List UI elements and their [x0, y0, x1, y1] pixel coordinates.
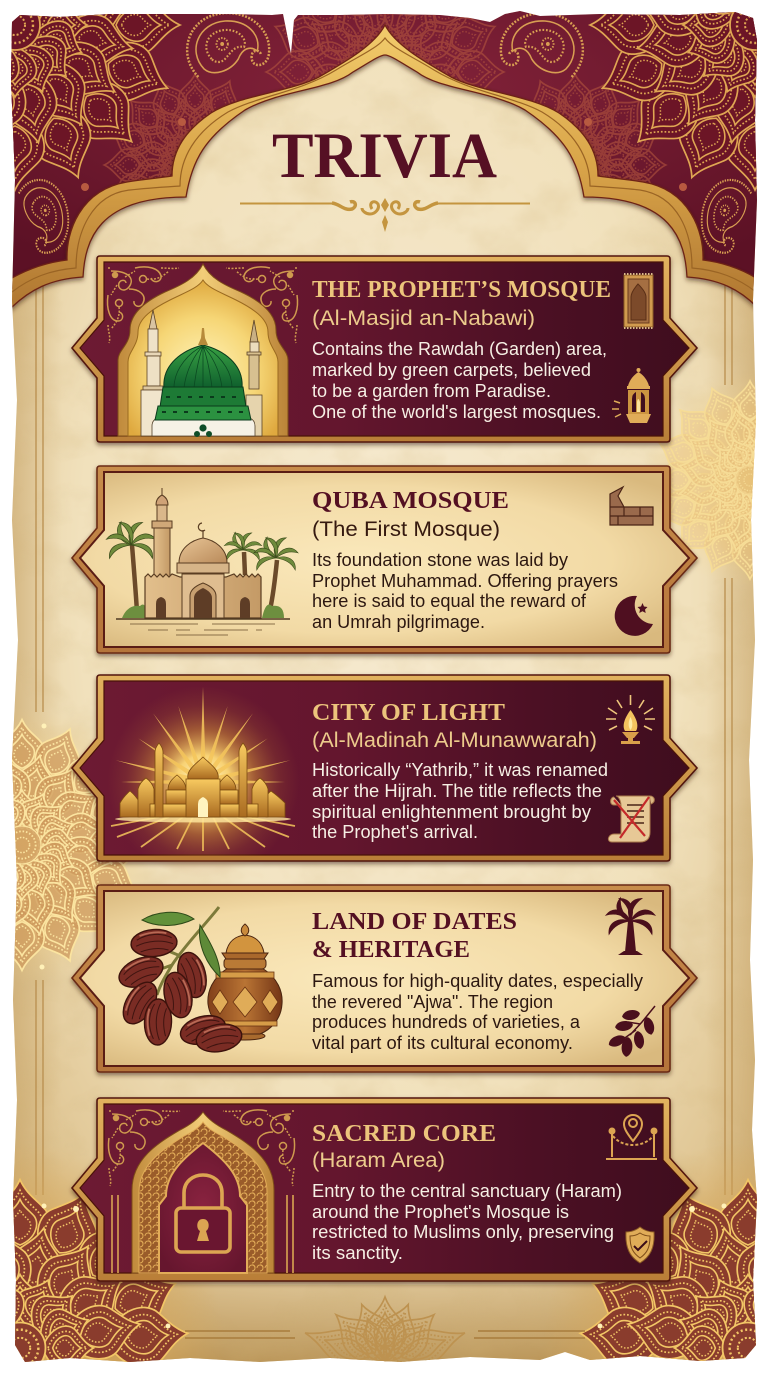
- icon: crescent and star: [615, 596, 653, 636]
- card 4 body: the revered "Ajwa". The region: [312, 991, 553, 1012]
- card background: [80, 681, 689, 855]
- jar pattern: [212, 972, 278, 1026]
- faded mandala: left: [102, 72, 237, 183]
- panel: Sacred Core: [72, 1098, 697, 1281]
- card frame: [72, 885, 697, 1072]
- white base: [152, 417, 255, 436]
- card 4 heading: LAND OF DATES: [312, 909, 517, 935]
- card 3 heading: CITY OF LIGHT: [312, 700, 505, 726]
- dome: [179, 538, 227, 563]
- minaret left: [141, 310, 163, 436]
- trefoil mark: [194, 424, 212, 437]
- faded mandala: right: [533, 72, 668, 183]
- card 2 subheading: (The First Mosque): [312, 518, 500, 541]
- mandala: bottom left corner: [13, 1165, 194, 1362]
- card 1 body: marked by green carpets, believed: [312, 359, 591, 380]
- card 1 body: to be a garden from Paradise.: [312, 380, 551, 401]
- gold arch frame: [0, 25, 768, 314]
- card 5 body: Entry to the central sanctuary (Haram): [312, 1180, 622, 1201]
- minaret: [152, 488, 172, 578]
- card 5 body: restricted to Muslims only, preserving: [312, 1221, 614, 1242]
- card background: [80, 1104, 689, 1273]
- bushes: [122, 604, 284, 618]
- title: TRIVIA: TRIVIA: [272, 120, 497, 192]
- panel: Land of Dates & Heritage: [72, 885, 697, 1072]
- card 4 body: vital part of its cultural economy.: [312, 1032, 573, 1053]
- branch: [150, 907, 219, 995]
- card 1 body: [312, 338, 607, 422]
- card 2 body: Its foundation stone was laid by: [312, 549, 569, 570]
- mandala: top left corner: [11, 14, 182, 192]
- card 3 body: after the Hijrah. The title reflects the: [312, 780, 602, 801]
- card 2 heading: QUBA MOSQUE: [312, 488, 509, 514]
- bottom double lines: [185, 1331, 585, 1338]
- card 5 body: [312, 1180, 622, 1263]
- card 1 heading: THE PROPHET’S MOSQUE: [312, 277, 611, 303]
- icon: shield with check: [626, 1227, 654, 1263]
- mandala: left middle glow: [12, 718, 132, 972]
- icon: crossed-out scroll: [608, 796, 654, 842]
- sparkles: [40, 724, 726, 1328]
- paisley: top left: [187, 13, 269, 77]
- ground rays: [111, 817, 295, 851]
- card 1 subheading: (Al-Masjid an-Nabawi): [312, 307, 535, 330]
- card 4 body: Famous for high-quality dates, especially: [312, 970, 644, 991]
- skyline silhouette: [120, 743, 285, 817]
- mandala: bottom right corner: [574, 1164, 757, 1361]
- glowing door: [198, 797, 208, 817]
- card 2 body: here is said to equal the reward of: [312, 590, 587, 611]
- horizon glow: [115, 816, 291, 822]
- palm trunks: [132, 545, 277, 612]
- faded mandala: centre: [264, 14, 506, 88]
- side doors: [156, 597, 250, 618]
- card background: [80, 262, 689, 436]
- ground lines: [116, 618, 290, 620]
- card 4 heading: [312, 909, 517, 963]
- panel: The Prophet's Mosque: [72, 256, 697, 442]
- card frame: [72, 466, 697, 653]
- paisley: top right: [501, 13, 583, 77]
- card 3 subheading: (Al-Madinah Al-Munawwarah): [312, 729, 597, 752]
- mandala: right middle glow: [658, 379, 756, 581]
- dome finial: [198, 328, 208, 345]
- card frame: [72, 1098, 697, 1281]
- illustration: ornate arch: [132, 1112, 274, 1273]
- side columns: [112, 1195, 293, 1273]
- dates: [115, 928, 244, 1055]
- card frame: [72, 256, 697, 442]
- accent dots: [81, 118, 687, 191]
- card background: [80, 472, 689, 647]
- side rule lines: [36, 284, 732, 1195]
- green drum: [160, 387, 246, 407]
- card 3 body: the Prophet's arrival.: [312, 821, 478, 842]
- illustration: dates and jar: [115, 907, 282, 1055]
- card 5 body: its sanctity.: [312, 1242, 403, 1263]
- paisley: left small: [18, 178, 70, 254]
- icon: ruined brick wall: [610, 487, 653, 525]
- panel: City of Light: [72, 675, 697, 878]
- leaves: [142, 912, 194, 926]
- green dome: [164, 345, 242, 388]
- top maroon header with ornaments: [0, 0, 768, 300]
- illustration: green dome mosque in arch: [118, 264, 288, 437]
- card 1 body: One of the world's largest mosques.: [312, 401, 601, 422]
- card 2 body: [312, 549, 618, 632]
- card 4 body: produces hundreds of varieties, a: [312, 1011, 581, 1032]
- card 5 heading: SACRED CORE: [312, 1121, 496, 1147]
- filigree corners: [108, 1110, 295, 1186]
- title divider flourish: [240, 198, 530, 232]
- building walls: [145, 574, 261, 618]
- icon: palm tree: [605, 895, 656, 955]
- card 5 body: around the Prophet's Mosque is: [312, 1201, 569, 1222]
- card background: [80, 891, 689, 1066]
- card 3 body: [312, 759, 608, 842]
- card 3 body: spiritual enlightenment brought by: [312, 801, 592, 822]
- icon: padlock: [176, 1175, 230, 1252]
- icon: prayer rug: [624, 274, 653, 328]
- minaret right: [246, 320, 262, 436]
- card 1 body: Contains the Rawdah (Garden) area,: [312, 338, 607, 359]
- illustration: radiant city skyline: [107, 686, 299, 878]
- card frame: [72, 675, 697, 861]
- sun glow: [107, 686, 299, 878]
- mandala: top right corner: [588, 12, 757, 192]
- icon: glowing lamp: [606, 695, 655, 744]
- palm crowns: [106, 519, 299, 574]
- illustration: Quba mosque with palms: [106, 488, 299, 635]
- icon: lantern: [612, 368, 651, 423]
- panel: Quba Mosque: [72, 466, 697, 653]
- card 2 body: an Umrah pilgrimage.: [312, 611, 485, 632]
- bottom centre lotus ornament: [304, 1294, 466, 1362]
- card 4 body: [312, 970, 644, 1053]
- card 2 body: Prophet Muhammad. Offering prayers: [312, 570, 618, 591]
- card 3 body: Historically “Yathrib,” it was renamed: [312, 759, 608, 780]
- sun rays: [115, 687, 291, 785]
- jar: [208, 924, 282, 1040]
- icon: date cluster: [607, 1006, 656, 1057]
- icon: rope barrier and pin: [606, 1115, 657, 1159]
- card 4 heading: & HERITAGE: [312, 937, 470, 963]
- gate block: [182, 574, 224, 618]
- filigree corners: [107, 267, 298, 343]
- paisley: right small: [700, 178, 752, 254]
- card 5 subheading: (Haram Area): [312, 1149, 445, 1172]
